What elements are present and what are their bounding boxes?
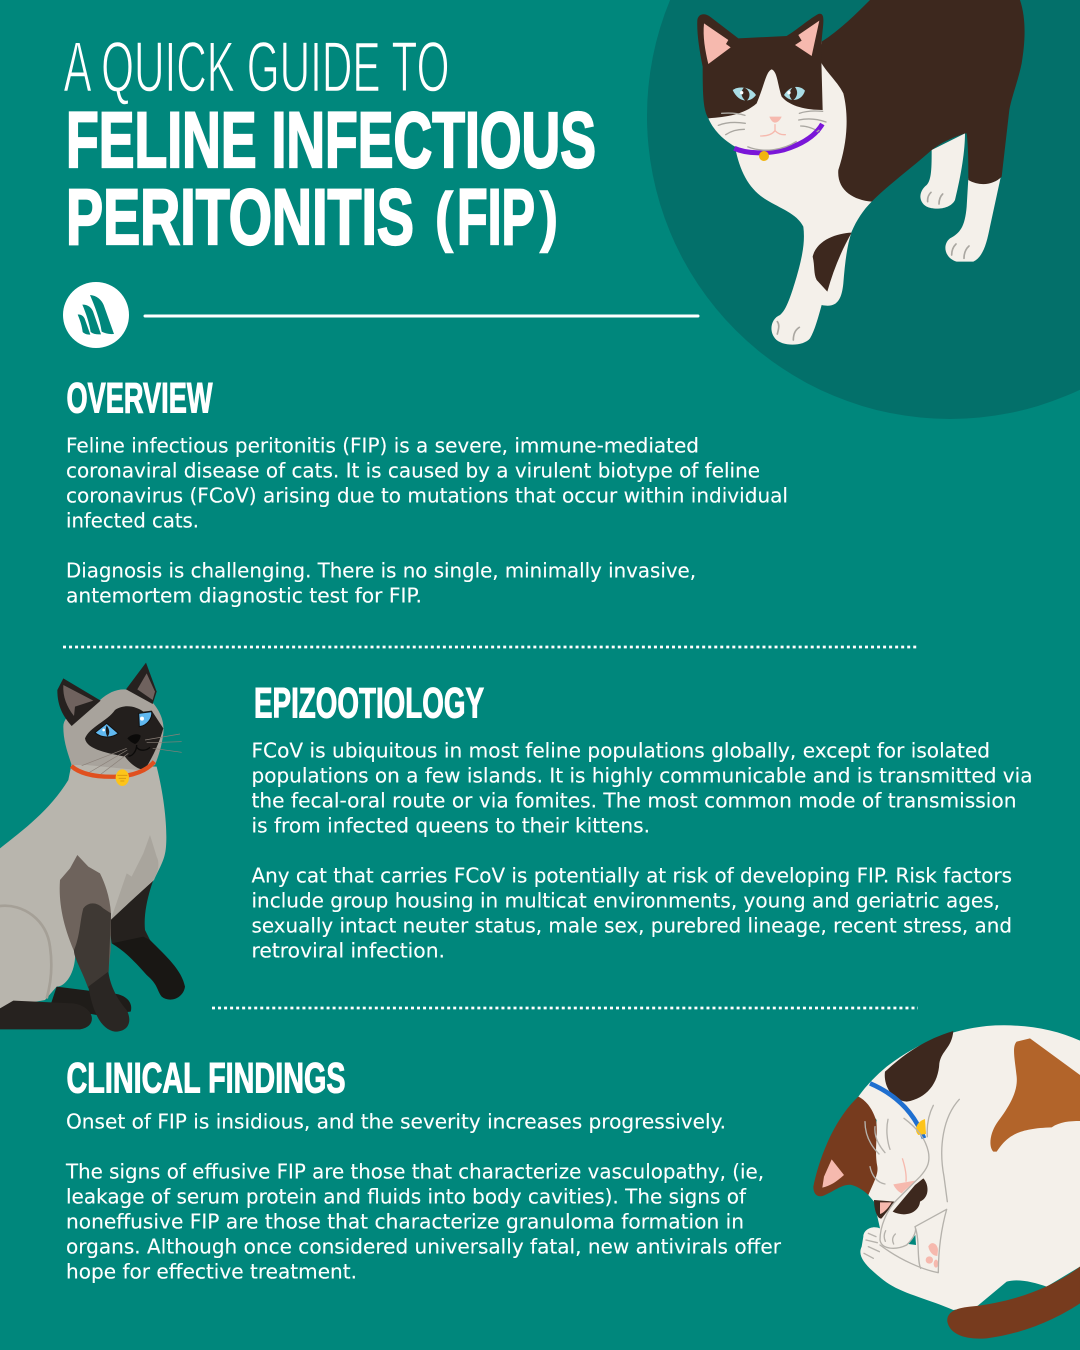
illustration: sleeping calico cat <box>813 1025 1080 1339</box>
heading: clinical findings: CLINICAL FINDINGS <box>66 1054 346 1102</box>
text block: overview <box>66 434 788 608</box>
text block: epizootiology: include group housing in multicat environments, young and geriatric ages, <box>252 888 1000 912</box>
text block: epizootiology <box>252 738 1032 962</box>
text block: epizootiology: retroviral infection. <box>252 938 445 962</box>
text block: clinical findings: leakage of serum protein and fluids into body cavities). The signs of <box>66 1184 747 1208</box>
heading: overview: OVERVIEW <box>66 374 213 422</box>
text block: epizootiology: the fecal-oral route or via fomites. The most common mode of transmission <box>252 788 1016 812</box>
text block: clinical findings <box>65 1110 782 1284</box>
title: PERITONITIS <box>66 172 414 261</box>
text block: overview: coronaviral disease of cats. It is caused by a virulent biotype of feline <box>66 458 760 482</box>
text block: clinical findings: hope for effective treatment. <box>66 1260 357 1284</box>
title: A QUICK GUIDE TO <box>64 28 450 108</box>
orange collar with tag <box>71 762 154 786</box>
paws and fold lines <box>864 1099 959 1273</box>
text block: epizootiology: populations on a few islands. It is highly communicable and is transmitted via <box>252 764 1032 788</box>
purple collar with bell <box>734 124 822 161</box>
text block: clinical findings: noneffusive FIP are those that characterize granuloma formation in <box>66 1210 744 1234</box>
calico cat head <box>813 1097 928 1219</box>
illustration: siamese cat <box>0 663 185 1032</box>
text block: epizootiology: FCoV is ubiquitous in most feline populations globally, except for isolated <box>252 738 990 762</box>
title: ) <box>540 179 558 253</box>
text block: overview: infected cats. <box>66 508 199 532</box>
blue collar with bell <box>870 1083 926 1138</box>
text block: clinical findings: organs. Although once considered universally fatal, new antivirals offer <box>66 1234 782 1258</box>
text block: clinical findings: The signs of effusive FIP are those that characterize vasculopathy, (ie, <box>65 1160 764 1184</box>
siamese cat head <box>57 663 182 777</box>
heading: epizootiology: EPIZOOTIOLOGY <box>254 680 484 728</box>
text block: overview: antemortem diagnostic test for FIP. <box>66 584 422 608</box>
text block: overview: coronavirus (FCoV) arising due to mutations that occur within individual <box>66 484 788 508</box>
title <box>64 28 596 261</box>
text block: overview: Feline infectious peritonitis (FIP) is a severe, immune-mediated <box>66 434 699 458</box>
title: FIP <box>457 172 535 261</box>
title: ( <box>435 179 453 253</box>
text block: clinical findings: Onset of FIP is insidious, and the severity increases progressively. <box>66 1110 726 1134</box>
text block: epizootiology: is from infected queens to their kittens. <box>252 814 650 838</box>
title: FELINE INFECTIOUS <box>66 95 596 184</box>
logo badge <box>63 282 129 348</box>
illustration: tuxedo cat <box>697 0 1025 345</box>
text block: epizootiology: Any cat that carries FCoV is potentially at risk of developing FIP. Risk factors <box>252 864 1012 888</box>
cat head <box>697 14 826 136</box>
text block: overview: Diagnosis is challenging. There is no single, minimally invasive, <box>66 558 696 582</box>
text block: epizootiology: sexually intact neuter status, male sex, purebred lineage, recent stress, and <box>252 914 1012 938</box>
dark teal circle behind cat <box>647 0 1080 419</box>
